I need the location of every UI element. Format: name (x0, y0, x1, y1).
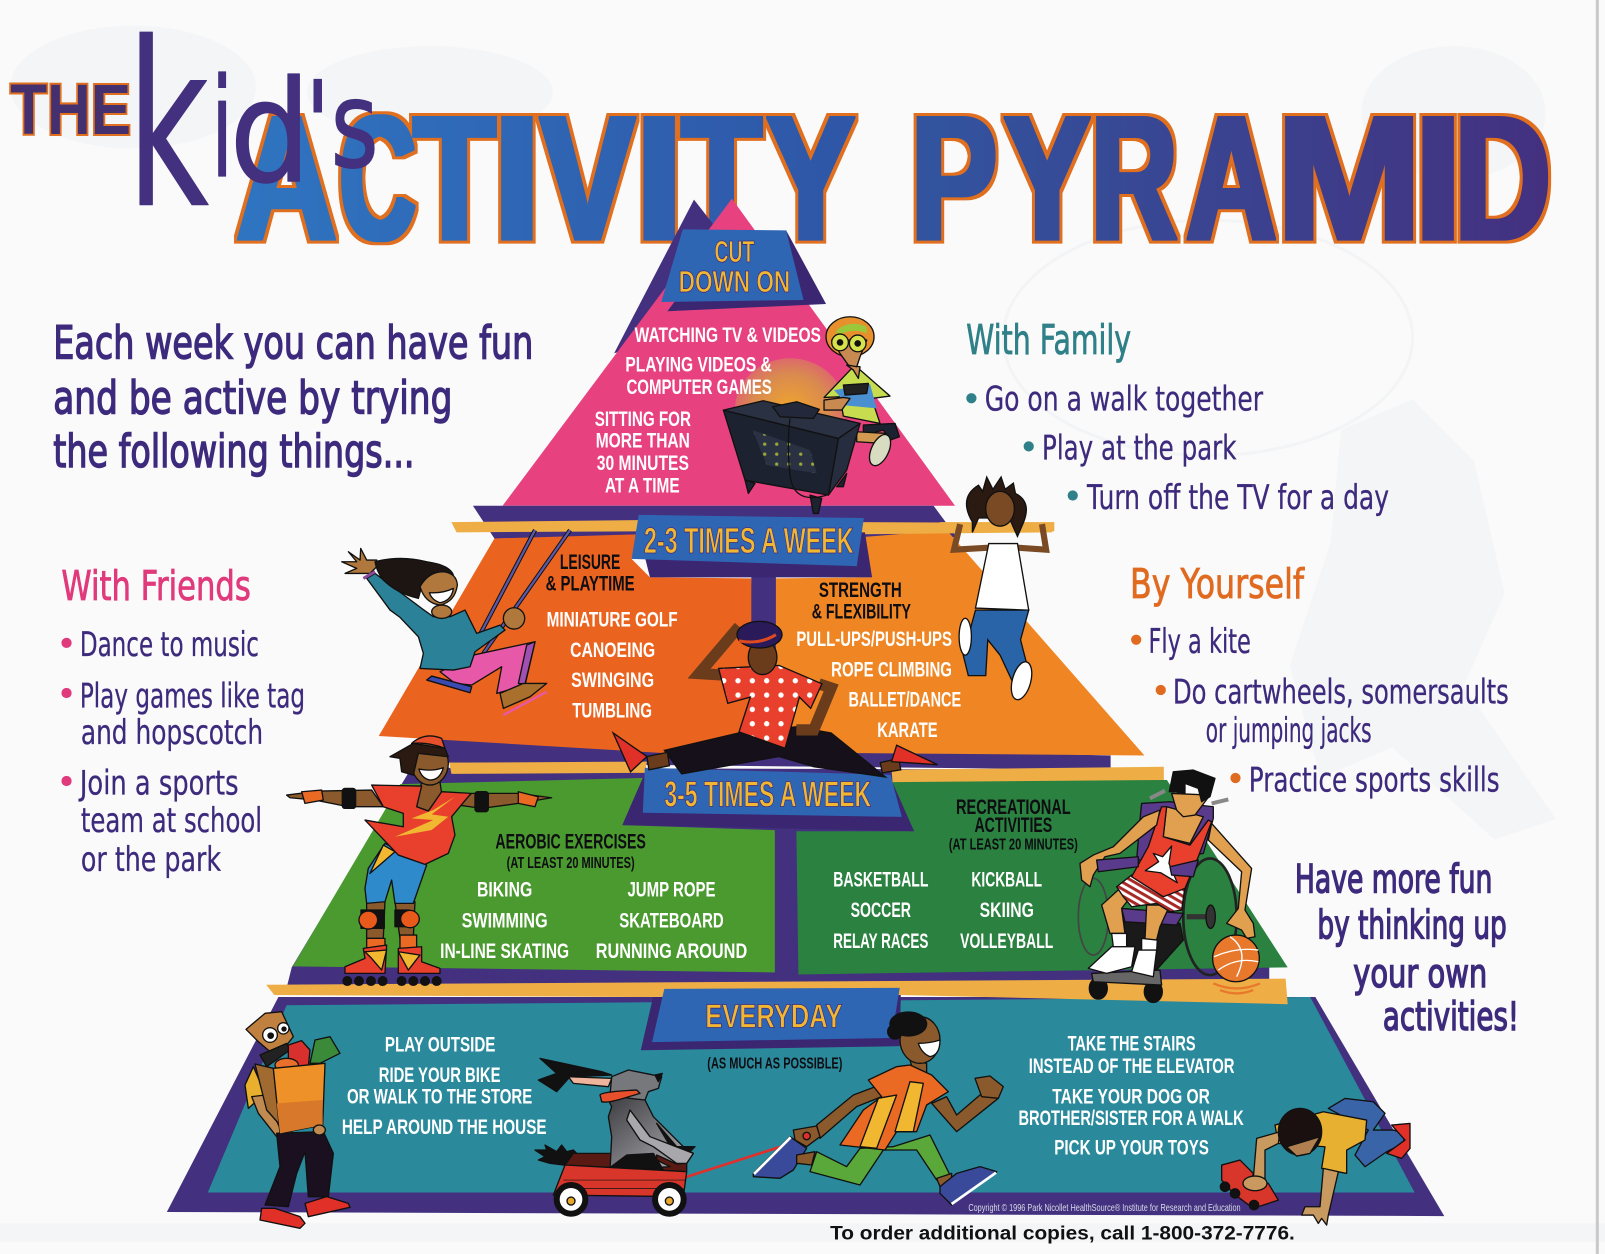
panel: with friends: Play games like tag (80, 676, 305, 715)
list: cut down on items (595, 323, 821, 497)
list: everyday right: TAKE THE STAIRS (1068, 1031, 1196, 1055)
icon: kid on roller blades (287, 736, 552, 986)
list: everyday right: BROTHER/SISTER FOR A WALK (1018, 1106, 1244, 1130)
title word: ACTIVITY: T (682, 79, 762, 278)
callout: have more fun: Have more fun (1295, 858, 1492, 903)
panel: with friends: and hopscotch (81, 713, 263, 752)
callout: have more fun (1295, 858, 1519, 1040)
icon: running kid pulling wagon (753, 1012, 1003, 1205)
panel: with family: Go on a walk together (985, 380, 1263, 419)
icon: kid crawling with toy truck (1220, 1098, 1410, 1225)
list: aerobic exercises: AEROBIC EXERCISES (495, 830, 646, 854)
list: strength and flexibility: ROPE CLIMBING (831, 658, 952, 682)
list: cut down on items: PLAYING VIDEOS & (625, 353, 772, 377)
list: recreational activities: ACTIVITIES (974, 813, 1052, 837)
list: aerobic exercises: SWIMMING (462, 908, 548, 932)
list: cut down on items: SITTING FOR (595, 407, 691, 431)
callout: have more fun: your own (1353, 952, 1487, 997)
panel: by yourself (1130, 560, 1509, 799)
banner: 2-3 times a week (632, 515, 864, 566)
title word: PYRAMID: P (911, 79, 997, 278)
icon: tv and kid with video game (723, 317, 899, 513)
intro text: and be active by trying (53, 372, 452, 425)
list: recreational activities: RECREATIONAL (956, 795, 1071, 819)
list: everyday left: HELP AROUND THE HOUSE (342, 1115, 547, 1139)
title word: PYRAMID: D (1455, 79, 1551, 278)
list: everyday right: INSTEAD OF THE ELEVATOR (1029, 1054, 1235, 1078)
list: aerobic exercises: SKATEBOARD (619, 908, 724, 932)
list: strength and flexibility: PULL-UPS/PUSH-UPS (796, 627, 952, 651)
icon: kid carrying groceries (245, 1012, 350, 1228)
title word: ACTIVITY: Y (767, 79, 855, 278)
title word: PYRAMID: R (1091, 79, 1177, 278)
title word: ACTIVITY: A (236, 79, 337, 278)
order line: To order additional copies, call 1-800-372-7776. (830, 1223, 1295, 1245)
panel: with friends: With Friends (61, 562, 251, 610)
pyramid (167, 199, 1444, 1216)
banner: everyday (652, 988, 900, 1042)
list: strength and flexibility: KARATE (877, 718, 938, 742)
list: leisure and playtime: TUMBLING (572, 699, 652, 723)
list: aerobic exercises: RUNNING AROUND (596, 939, 747, 963)
list: everyday left (342, 1032, 547, 1139)
list: aerobic exercises: (AT LEAST 20 MINUTES) (507, 855, 635, 872)
list: cut down on items: 30 MINUTES (597, 451, 689, 475)
list: leisure and playtime (546, 550, 678, 723)
list: cut down on items: MORE THAN (596, 428, 690, 452)
level: 2-3 times a week (379, 506, 1144, 770)
panel: with family (966, 316, 1389, 517)
list: strength and flexibility: & FLEXIBILITY (812, 599, 911, 623)
title word: PYRAMID: Y (1004, 79, 1090, 278)
banner: cut down on (661, 229, 804, 302)
intro text (53, 316, 533, 478)
list: everyday left: RIDE YOUR BIKE (379, 1063, 501, 1087)
list: strength and flexibility: BALLET/DANCE (849, 687, 961, 711)
list: leisure and playtime: MINIATURE GOLF (547, 607, 678, 631)
intro text: Each week you can have fun (53, 316, 533, 369)
banner: cut down on: CUT (714, 234, 755, 269)
panel: with family: Play at the park (1042, 429, 1237, 468)
panel: by yourself: or jumping jacks (1206, 711, 1372, 750)
list: recreational activities: BASKETBALL (833, 867, 928, 891)
banner: everyday: EVERYDAY (705, 998, 842, 1036)
list: everyday left: PLAY OUTSIDE (385, 1032, 495, 1056)
panel: with friends: Dance to music (80, 625, 259, 664)
list: recreational activities (833, 795, 1078, 953)
list: aerobic exercises (440, 830, 747, 963)
title word: ACTIVITY: I (492, 79, 541, 278)
title word: kid's: d (229, 51, 311, 215)
list: recreational activities: RELAY RACES (833, 929, 928, 953)
panel: with friends (61, 562, 305, 879)
list: everyday right: PICK UP YOUR TOYS (1054, 1136, 1209, 1160)
icon: kid on pull-up bar (940, 477, 1054, 702)
list: cut down on items: COMPUTER GAMES (626, 375, 772, 399)
title word: kid's: k (127, 0, 209, 259)
level: everyday (167, 979, 1444, 1216)
title word: PYRAMID: A (1186, 79, 1276, 278)
title word: PYRAMID: I (1414, 79, 1463, 278)
title word: ACTIVITY: V (540, 79, 635, 278)
list: aerobic exercises: JUMP ROPE (627, 878, 715, 902)
icon: boy doing splits (613, 621, 938, 777)
tv glow (735, 358, 845, 461)
icon: dog in red wagon (535, 1058, 807, 1216)
list: everyday left: OR WALK TO THE STORE (347, 1084, 532, 1108)
list: leisure and playtime: & PLAYTIME (546, 572, 635, 596)
title word: PYRAMID: M (1276, 79, 1422, 278)
intro text: the following things... (53, 425, 415, 478)
note: as much as possible: (AS MUCH AS POSSIBLE) (707, 1056, 842, 1073)
copyright: Copyright © 1996 Park Nicollet HealthSource® Institute for Research and Education (968, 1203, 1241, 1214)
title word: ACTIVITY: I (635, 79, 684, 278)
title word: ACTIVITY: C (340, 79, 416, 278)
list: leisure and playtime: CANOEING (570, 638, 655, 662)
list: strength and flexibility: STRENGTH (819, 578, 902, 602)
list: recreational activities: KICKBALL (971, 867, 1042, 891)
list: leisure and playtime: LEISURE (560, 550, 620, 574)
icon: kid in wheelchair (1078, 770, 1260, 1002)
panel: by yourself: Practice sports skills (1249, 760, 1500, 799)
list: everyday right (1018, 1031, 1244, 1160)
list: strength and flexibility (796, 578, 961, 742)
list: aerobic exercises: IN-LINE SKATING (440, 939, 569, 963)
panel: by yourself: Fly a kite (1148, 622, 1251, 661)
list: recreational activities: VOLLEYBALL (960, 929, 1053, 953)
list: cut down on items: AT A TIME (605, 473, 680, 497)
level: 3-5 times a week (287, 762, 1288, 988)
list: recreational activities: SOCCER (851, 898, 911, 922)
banner: 3-5 times a week: 3-5 TIMES A WEEK (664, 775, 871, 815)
list: leisure and playtime: SWINGING (571, 668, 654, 692)
icon: girl on swing (342, 530, 570, 715)
panel: by yourself: By Yourself (1130, 560, 1305, 608)
callout: have more fun: activities! (1383, 995, 1519, 1040)
title word: ACTIVITY: T (414, 79, 495, 278)
panel: with friends: team at school (81, 801, 262, 840)
title word: THE: THE (10, 70, 131, 150)
panel: with friends: Join a sports (78, 763, 238, 802)
panel: with family: Turn off the TV for a day (1086, 478, 1389, 517)
panel: with friends: or the park (81, 840, 221, 879)
banner: 3-5 times a week (643, 768, 902, 817)
list: cut down on items: WATCHING TV & VIDEOS (635, 323, 821, 347)
callout: have more fun: by thinking up (1317, 904, 1507, 949)
level: cut down on (503, 199, 955, 506)
title word: kid's: 's (305, 56, 379, 196)
list: recreational activities: SKIING (980, 898, 1034, 922)
title word: kid's: i (211, 50, 233, 209)
banner: 2-3 times a week: 2-3 TIMES A WEEK (644, 521, 854, 561)
list: aerobic exercises: BIKING (477, 878, 532, 902)
list: everyday right: TAKE YOUR DOG OR (1052, 1084, 1210, 1108)
banner: cut down on: DOWN ON (679, 264, 790, 299)
panel: with family: With Family (966, 316, 1131, 364)
list: recreational activities: (AT LEAST 20 MINUTES) (949, 837, 1078, 854)
title: The Kid's Activity Pyramid (10, 0, 1551, 278)
